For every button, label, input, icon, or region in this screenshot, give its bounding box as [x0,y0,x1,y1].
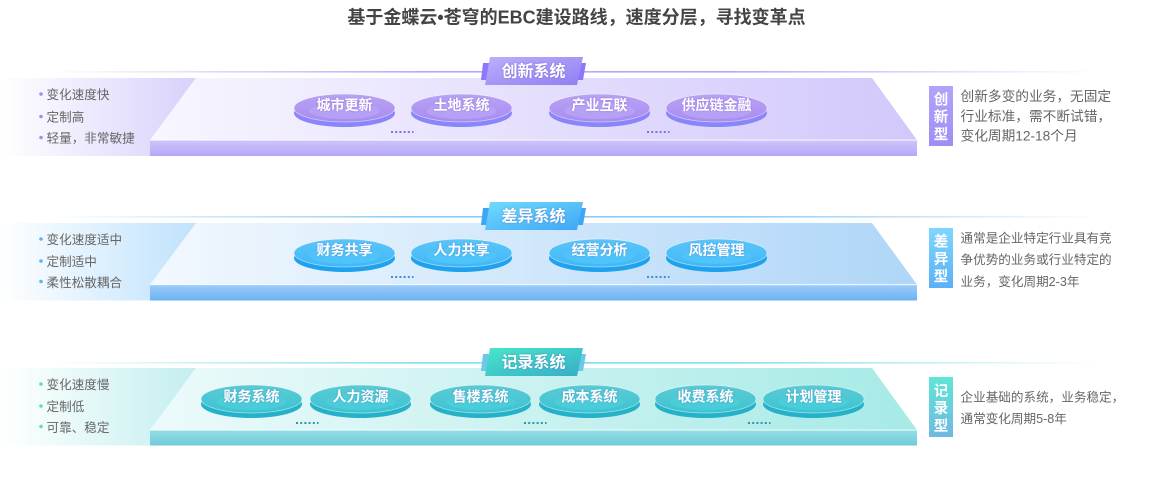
pill: 财务共享 [294,239,395,272]
pill: 人力共享 [411,239,512,272]
pill: 成本系统: 成本系统 [562,388,618,404]
text: 差异型 description: 通常是企业特定行业具有竞 [960,230,1112,246]
text: 创新型 description: 变化周期12-18个月 [960,128,1078,144]
list: 差异系统 traits [39,232,122,290]
pill: 计划管理 [763,385,864,418]
text: 记录型 description: 通常变化周期5-8年 [960,411,1067,426]
ellipsis dots [391,276,670,278]
text: 创新型 description: 创新多变的业务，无固定 [960,88,1111,104]
pill: 售楼系统 [430,385,531,418]
text: 差异型 description: 业务，变化周期2-3年 [960,274,1079,289]
badge: 记录系统: 记录系统 [501,352,566,372]
tag: 创新型: 新 [934,108,949,126]
text: 差异型 description [960,230,1112,289]
tag: 记录型 [929,377,953,437]
badge: 差异系统: 差异系统 [501,206,566,226]
tag: 记录型: 型 [934,418,948,435]
text: 创新型 description: 行业标准，需不断试错， [960,109,1111,124]
tag: 创新型 [929,86,953,146]
list: 记录系统 traits: 可靠、稳定 [46,420,110,435]
list: 创新系统 traits: 定制高 [46,110,84,124]
pill: 城市更新: 城市更新 [316,97,372,113]
list: 创新系统 traits [39,87,135,146]
tag: 创新型: 创 [934,90,948,108]
text: 记录型 description: 企业基础的系统，业务稳定， [960,390,1124,404]
pill: 成本系统 [539,385,640,418]
pill: 风控管理: 风控管理 [688,242,744,258]
tag: 创新型: 型 [934,126,948,144]
tag: 差异型 [929,228,953,288]
panel: 记录系统 row [0,348,1124,446]
pill: 土地系统 [411,94,512,127]
badge: 创新系统: 创新系统 [501,62,566,80]
pill: 供应链金融 [666,94,767,127]
panel: 差异系统 row [0,202,1112,300]
list: 差异系统 traits: 变化速度适中 [46,232,122,247]
pill: 人力共享: 人力共享 [434,242,490,258]
pill: 土地系统: 土地系统 [434,97,490,113]
title: 基于金蝶云•苍穹的EBC建设路线，速度分层，寻找变革点 [347,6,806,28]
pill: 财务系统 [201,385,302,418]
pill: 风控管理 [666,239,767,272]
pill: 经营分析 [549,239,650,272]
tag: 差异型: 差 [934,232,948,250]
pill: 收费系统 [655,385,756,418]
text: 记录型 description [960,390,1124,426]
text: 创新型 description [960,88,1111,144]
pill: 城市更新 [294,94,395,127]
pill: 供应链金融: 供应链金融 [682,97,752,113]
pill: 人力资源 [310,385,411,418]
pill: 收费系统: 收费系统 [678,388,734,404]
tag: 差异型: 型 [934,268,948,286]
panel: 创新系统 row [0,57,1111,156]
tag: 记录型: 录 [934,400,948,417]
tag: 差异型: 异 [934,251,948,268]
list: 创新系统 traits: 轻量，非常敏捷 [46,132,135,146]
badge: 创新系统 [481,57,586,85]
list: 记录系统 traits [39,377,110,435]
pill: 经营分析: 经营分析 [572,242,628,258]
pill: 售楼系统: 售楼系统 [452,388,508,404]
list: 记录系统 traits: 变化速度慢 [46,377,110,392]
pill: 产业互联 [549,94,650,127]
pill: 财务共享: 财务共享 [316,242,372,258]
pill: 产业互联: 产业互联 [572,97,628,113]
list: 记录系统 traits: 定制低 [46,400,85,414]
text: 差异型 description: 争优势的业务或行业特定的 [960,252,1112,267]
pill: 人力资源: 人力资源 [332,388,388,404]
pill: 财务系统: 财务系统 [224,388,280,404]
list: 差异系统 traits: 定制适中 [46,255,97,269]
ellipsis dots [296,422,770,424]
list: 创新系统 traits: 变化速度快 [46,87,110,102]
tag: 记录型: 记 [934,383,949,400]
badge: 差异系统 [481,202,586,230]
pill: 计划管理: 计划管理 [786,388,842,404]
badge: 记录系统 [481,348,586,376]
list: 差异系统 traits: 柔性松散耦合 [46,276,122,290]
ellipsis dots [391,131,670,133]
